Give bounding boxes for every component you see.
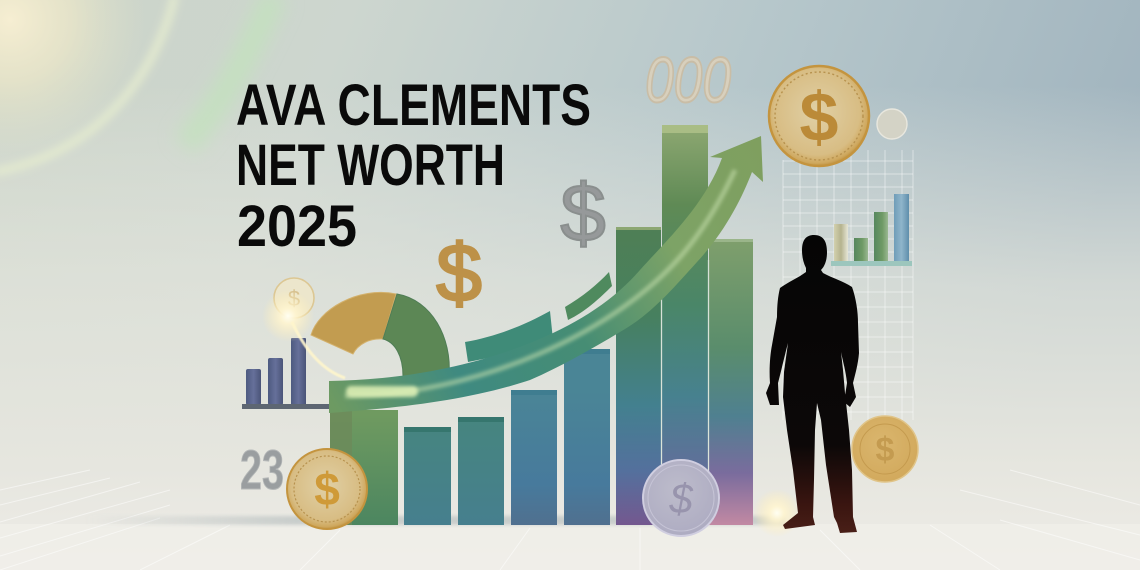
coin: gold right — [852, 416, 918, 482]
title line 3: 2025 — [237, 194, 357, 259]
coin: silver bottom — [643, 460, 719, 536]
decorative zeros: 000 — [645, 44, 731, 116]
flare and light streak — [262, 290, 345, 378]
donut green segment — [383, 294, 449, 376]
floor — [0, 470, 1140, 570]
icon: pale coin near flare — [274, 278, 314, 318]
icon: pale coin near flare: $ — [288, 286, 300, 311]
coin: large gold bottom left — [287, 449, 367, 529]
donut chart — [311, 292, 449, 376]
title line 2: NET WORTH — [236, 133, 505, 198]
mini bar chart left — [242, 338, 332, 409]
grid panel behind person — [783, 150, 913, 420]
flare at floor — [753, 489, 801, 537]
coin: small silver top — [877, 109, 907, 139]
icon: gray dollar sign: $ — [560, 168, 606, 259]
coin: large gold top — [769, 66, 869, 166]
coin: silver bottom: $ — [668, 475, 693, 522]
donut gold segment — [311, 292, 396, 354]
icon: gold dollar sign: $ — [436, 228, 482, 319]
title line 1: AVA CLEMENTS — [236, 73, 591, 138]
growth arrow — [329, 136, 763, 413]
mini bar chart right — [831, 194, 912, 266]
coin: large gold top: $ — [800, 78, 838, 156]
bar chart — [330, 125, 753, 525]
title: Ava Clements Net Worth 2025 — [236, 73, 591, 259]
coin: large gold bottom left: $ — [314, 463, 340, 515]
number 23: 23 — [240, 438, 284, 501]
ribbon fragments above arrow — [465, 272, 612, 362]
coin: gold right: $ — [876, 431, 895, 469]
person silhouette — [766, 235, 859, 533]
